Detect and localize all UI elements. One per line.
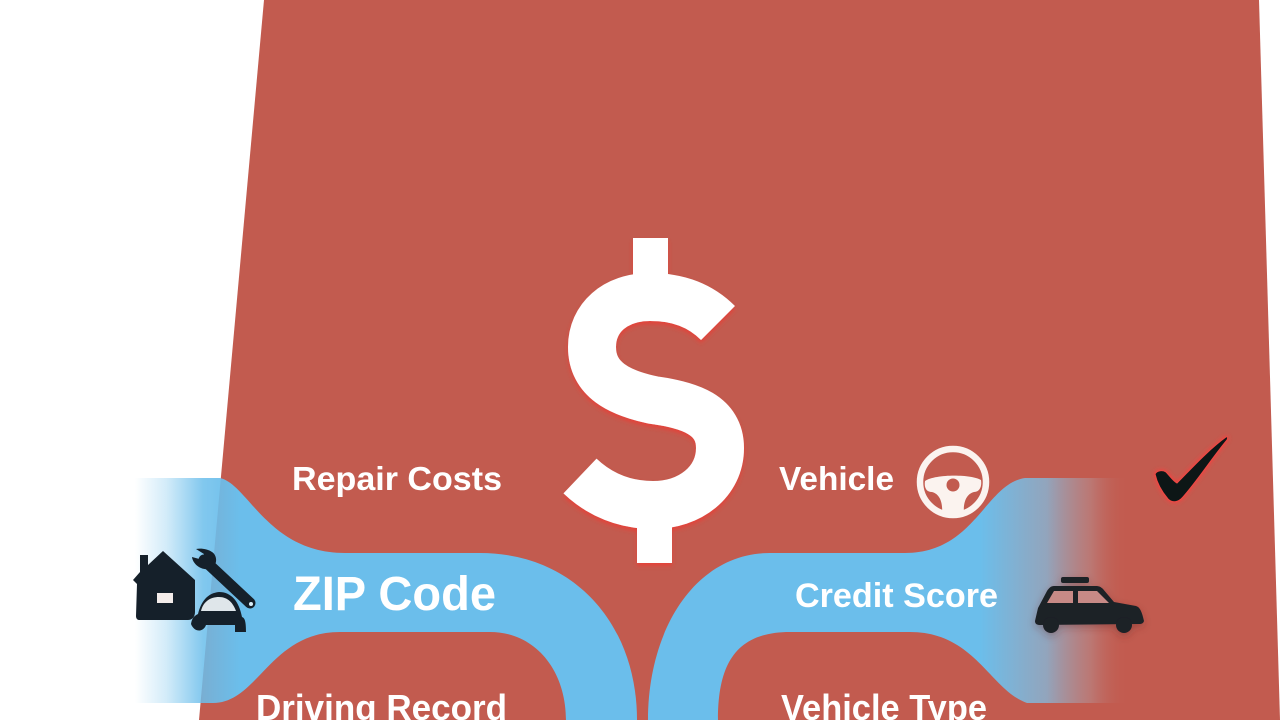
label: Repair Costs: Repair Costs — [292, 460, 502, 497]
icon: station wagon car — [1035, 577, 1144, 633]
left blue road: ZIP Code — [135, 478, 637, 720]
right blue road: Credit Score — [648, 478, 1130, 720]
icon: dollar sign — [580, 238, 720, 563]
icon: house, wrench and car — [133, 549, 253, 632]
icon: check mark — [1155, 437, 1228, 502]
label: Credit Score: Credit Score — [795, 577, 998, 615]
label: ZIP Code: ZIP Code — [293, 568, 496, 621]
label: Vehicle: Vehicle — [779, 460, 894, 497]
icon: steering wheel — [920, 449, 986, 515]
